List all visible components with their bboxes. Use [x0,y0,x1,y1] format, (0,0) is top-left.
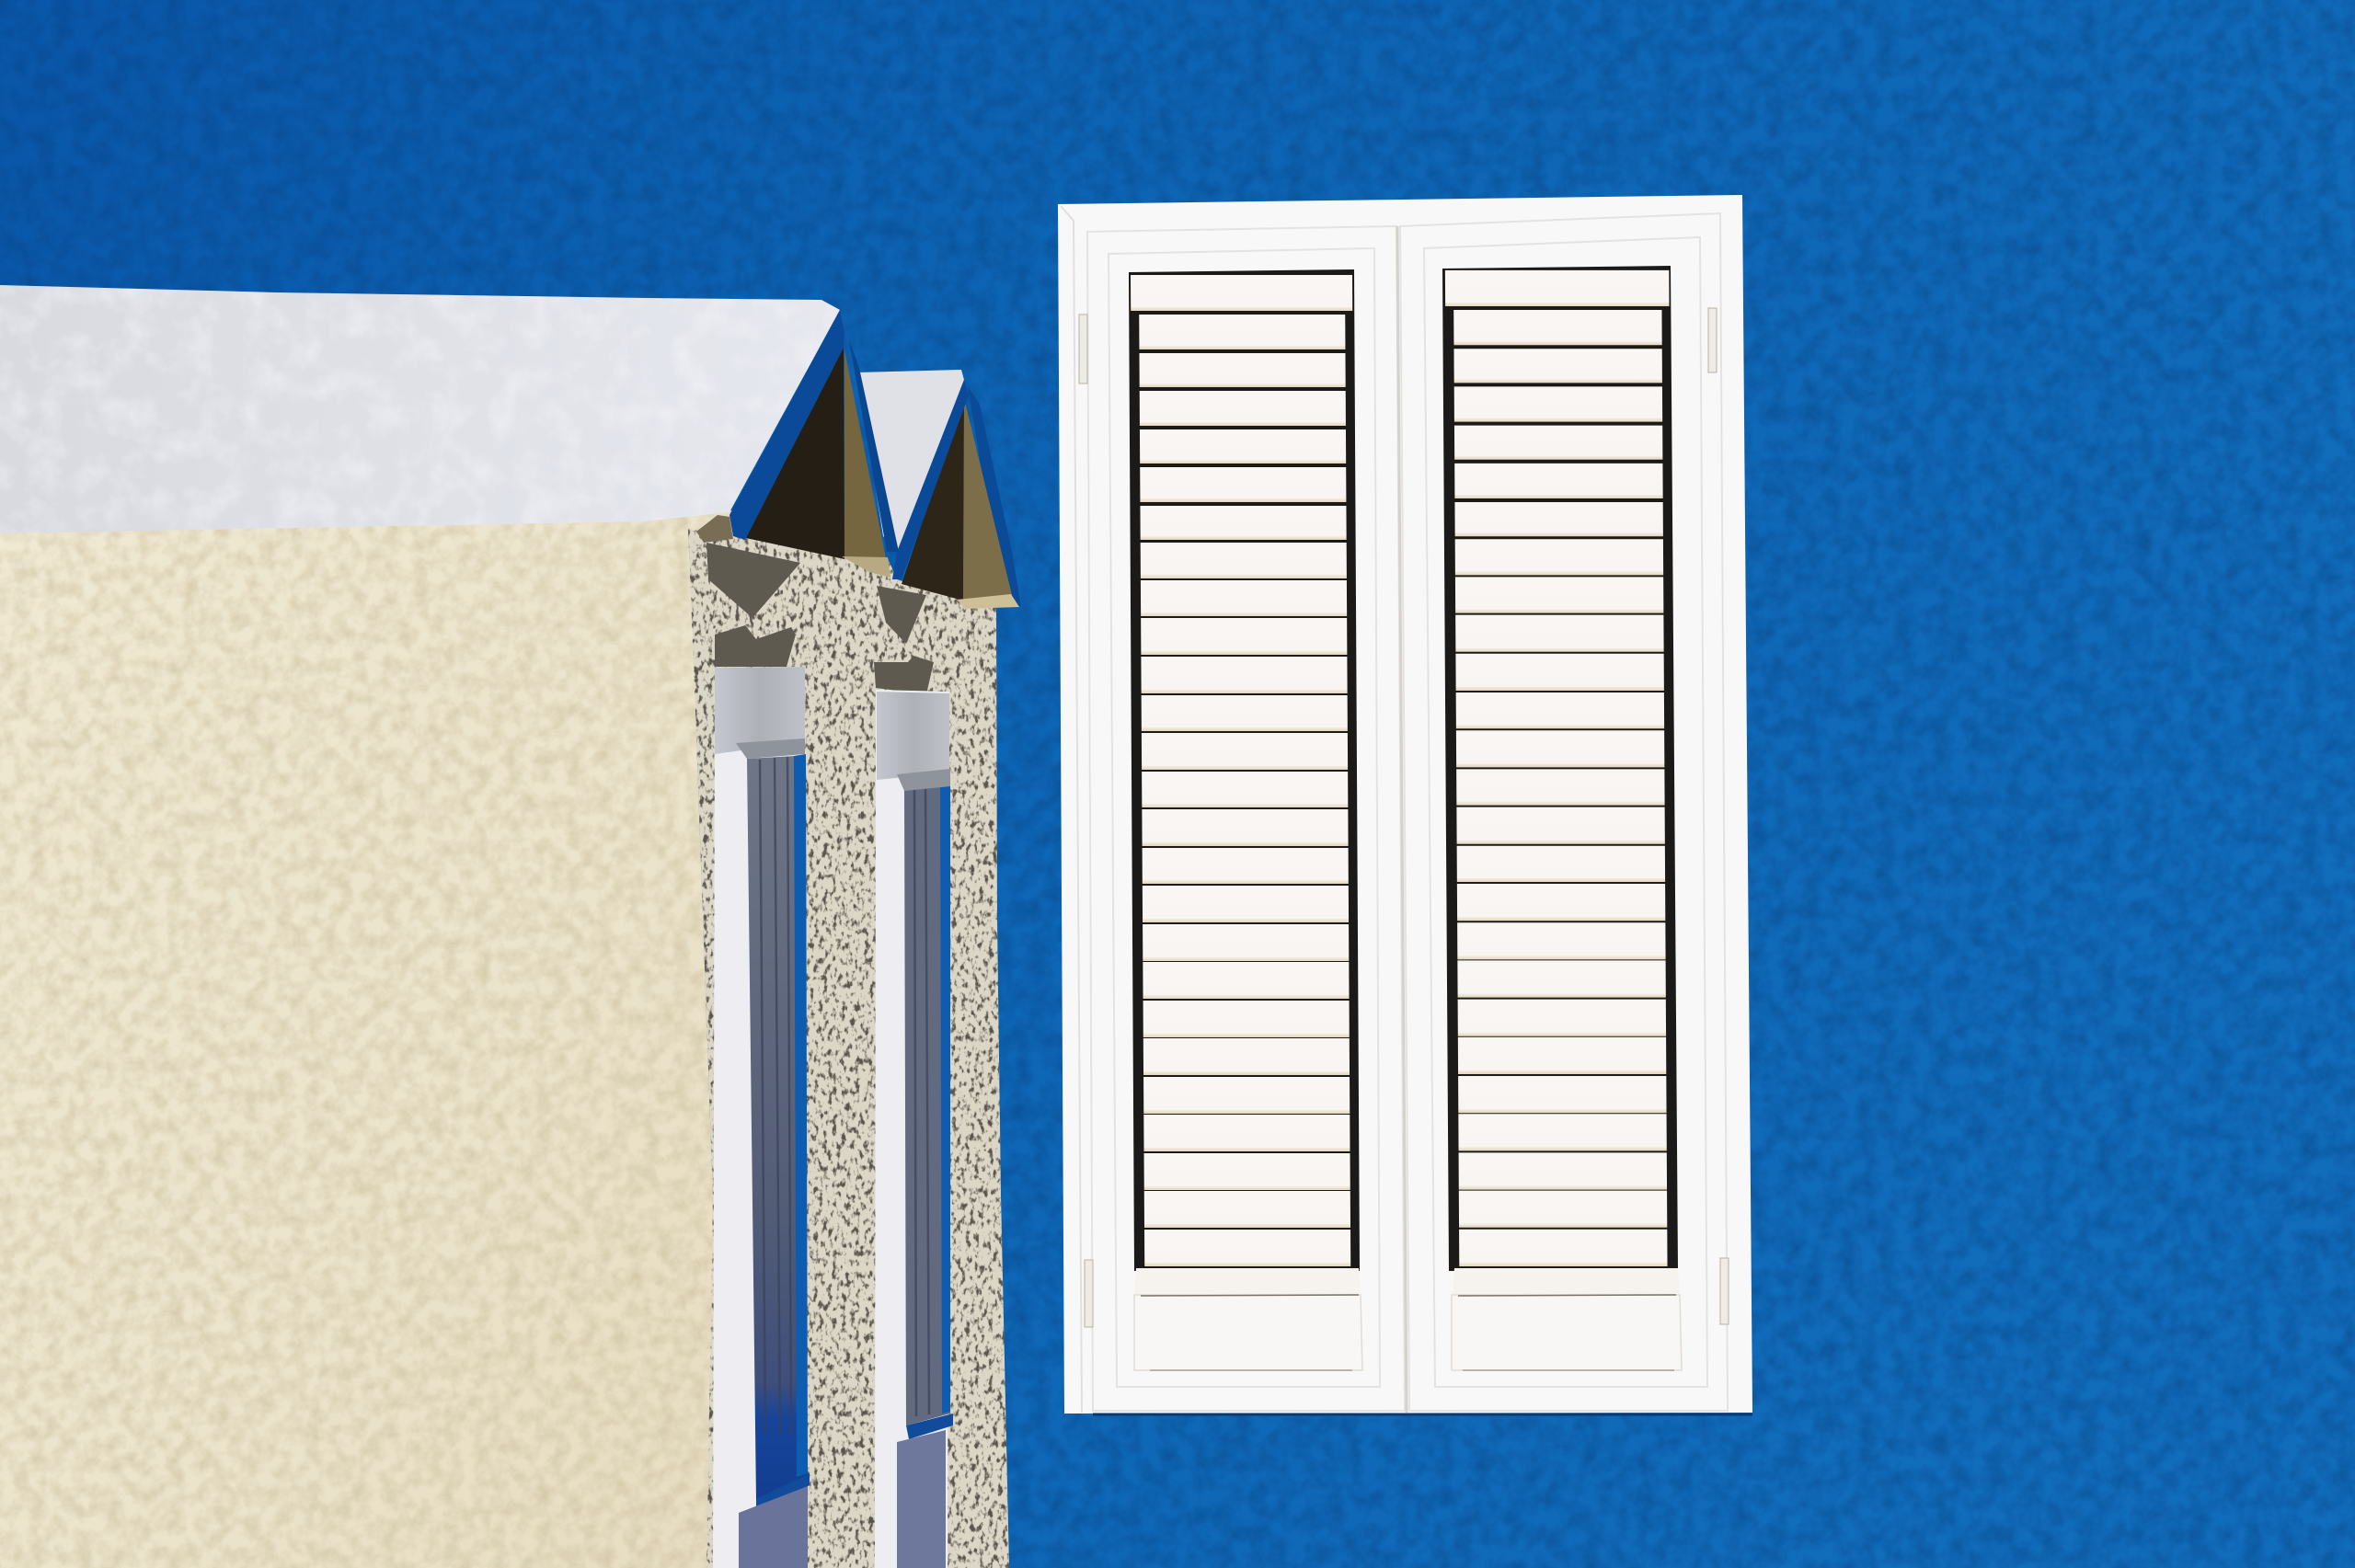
left building window [713,667,810,1568]
right shutter slats [1445,270,1675,1266]
lower panel [897,1430,946,1568]
glass streaks [760,757,791,1435]
header plate [715,667,805,754]
front white roof [0,285,844,543]
frame edge highlights [1061,206,1082,1413]
blue strip [794,754,808,1477]
cast shadows under the gables [706,543,934,694]
rear white roof [857,370,969,579]
blue sill bar [756,1473,810,1516]
white shuttered window [1058,195,1752,1414]
shutter outlines [1087,213,1728,1411]
front gable [746,340,899,578]
glass panel [747,756,808,1501]
rough stucco side wall [688,529,1009,1568]
glass panel [904,786,950,1425]
left lower panel [1134,1268,1362,1370]
blue sill bar [906,1413,953,1439]
centre gap [1397,226,1407,1413]
right louvre opening [1442,266,1678,1271]
frame [713,667,808,1568]
rear gable [902,386,1021,609]
glass streaks [914,787,929,1416]
left shutter slats [1131,275,1358,1266]
right lower panel [1452,1268,1682,1370]
left louvre opening [1129,269,1360,1271]
frame [875,690,949,1568]
hinges [1079,308,1729,1327]
blue strip [940,782,950,1413]
lower panel [739,1486,808,1568]
outer frame [1058,195,1752,1413]
right building window [875,690,953,1568]
cream building front wall [0,510,750,1568]
bottom shadow line [1093,1413,1752,1416]
header plate [877,692,949,780]
